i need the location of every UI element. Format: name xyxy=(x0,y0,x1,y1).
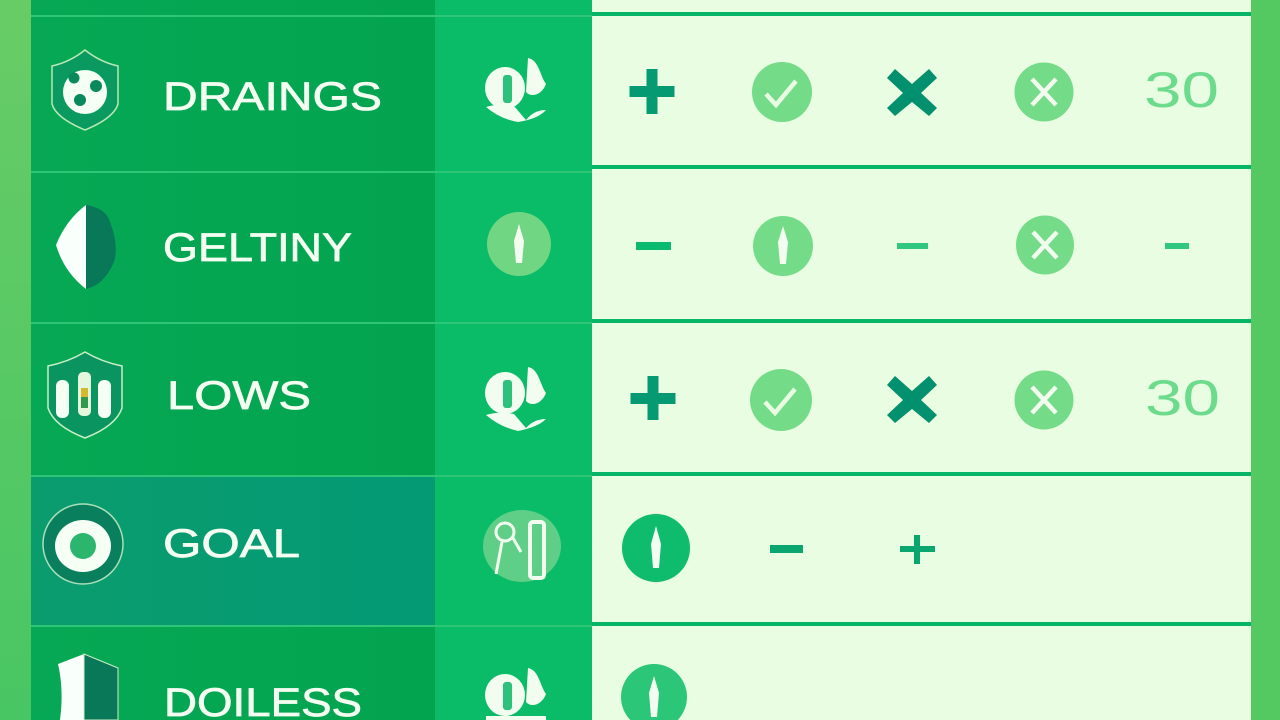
crest: GELTINY xyxy=(56,205,116,289)
label: LOWS: LOWS xyxy=(167,374,311,418)
cell: arrow badge xyxy=(753,216,813,276)
crest: LOWS xyxy=(48,352,122,438)
cell: plus xyxy=(630,69,674,114)
cell: minus xyxy=(1165,243,1189,249)
cell: x badge xyxy=(1016,216,1074,274)
cell: minus xyxy=(636,242,671,250)
cell: minus xyxy=(897,243,928,249)
icon: GOAL xyxy=(483,510,561,582)
icon: arrow badge xyxy=(487,212,551,276)
row: GOAL xyxy=(43,504,935,584)
name column xyxy=(31,0,435,720)
cell: check badge xyxy=(750,369,812,431)
label: GOAL: GOAL xyxy=(163,522,300,566)
icon: DOILESS xyxy=(485,668,546,720)
cell: minus xyxy=(770,545,803,553)
cell: x badge xyxy=(1014,62,1074,122)
row: DOILESS xyxy=(58,654,687,720)
icon column xyxy=(435,0,592,720)
label: DRAINGS: DRAINGS xyxy=(163,75,382,119)
cell: plus xyxy=(630,376,676,420)
icon: DRAINGS xyxy=(485,58,546,122)
row: LOWS xyxy=(48,352,1220,438)
cell: plus xyxy=(900,535,935,564)
cell: arrow badge xyxy=(621,664,687,720)
cell: arrow badge xyxy=(622,514,690,582)
cell: cross xyxy=(887,376,937,423)
highlighted GOAL row background xyxy=(31,476,435,625)
label: GELTINY: GELTINY xyxy=(163,226,352,270)
row: GELTINY xyxy=(56,205,1189,289)
right border band xyxy=(1251,0,1280,720)
cell: value 30: 30 xyxy=(1145,370,1220,426)
crest: DRAINGS xyxy=(52,50,118,130)
cell: x badge xyxy=(1014,370,1074,430)
crest: GOAL xyxy=(43,504,123,584)
row: DRAINGS xyxy=(52,50,1219,130)
cell: check badge xyxy=(752,62,812,122)
cell: cross xyxy=(887,69,937,116)
cell: value 30: 30 xyxy=(1144,62,1219,118)
values column xyxy=(592,0,1251,720)
left border band xyxy=(0,0,31,720)
crest: DOILESS xyxy=(58,654,118,720)
icon: LOWS xyxy=(485,367,546,431)
